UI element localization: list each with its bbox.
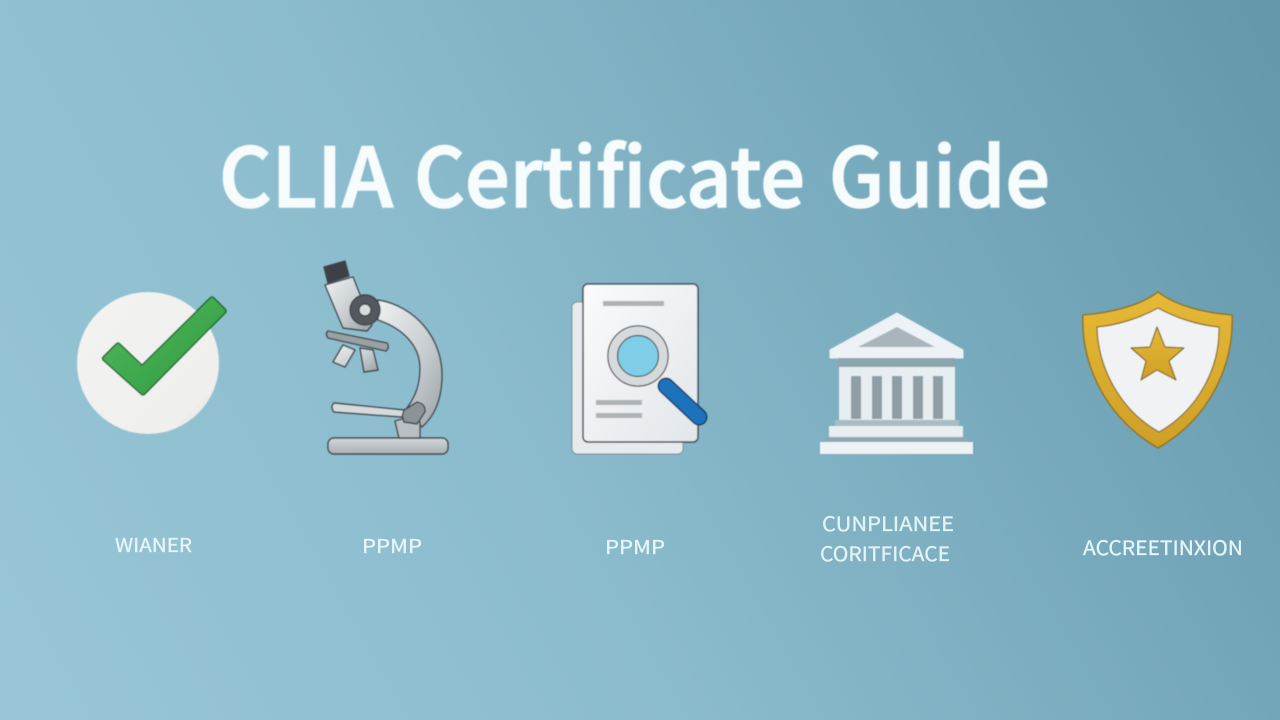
frieze shadow <box>838 358 955 367</box>
magnifying glass lens <box>608 326 668 386</box>
icon: institution building <box>820 313 973 454</box>
pediment <box>858 327 935 347</box>
label: PPMP document: PPMP <box>605 533 665 560</box>
icon: microscope <box>324 261 448 454</box>
steps <box>835 420 959 426</box>
roof <box>830 313 963 358</box>
microscope knob <box>350 295 380 325</box>
title: Guide <box>829 112 1050 231</box>
columns <box>851 376 943 419</box>
icon: document with magnifying glass <box>572 284 699 454</box>
microscope stand joint <box>395 416 420 438</box>
microscope stage <box>332 403 404 417</box>
title <box>219 112 1050 231</box>
title: CLIA <box>219 112 393 231</box>
microscope body tube <box>325 277 372 331</box>
icon: green check mark on white disc <box>77 292 226 434</box>
magnifying glass handle <box>666 386 699 417</box>
microscope plate <box>326 331 388 351</box>
label: accreditation: ACCREETINXION <box>1083 532 1243 561</box>
microscope arm <box>378 300 442 427</box>
icon: gold shield with star <box>1083 292 1232 448</box>
back page <box>572 302 683 454</box>
microscope objectives <box>333 345 378 372</box>
microscope focus block <box>401 402 425 424</box>
entablature and column wall <box>839 367 955 420</box>
microscope eyepiece <box>324 261 349 283</box>
title: Certificate <box>414 112 805 231</box>
star <box>1131 327 1184 380</box>
label: waiver: WIANER <box>115 531 192 558</box>
shield outer <box>1083 292 1232 448</box>
shield inner <box>1097 308 1219 432</box>
label: compliance certificate: CORITFICACE <box>820 538 950 567</box>
label: compliance certificate <box>820 508 954 567</box>
label: PPMP microscope: PPMP <box>362 532 422 559</box>
label: compliance certificate: CUNPLIANEE <box>822 508 954 537</box>
microscope base <box>328 438 448 454</box>
document lines <box>596 301 664 418</box>
front page <box>583 284 698 442</box>
